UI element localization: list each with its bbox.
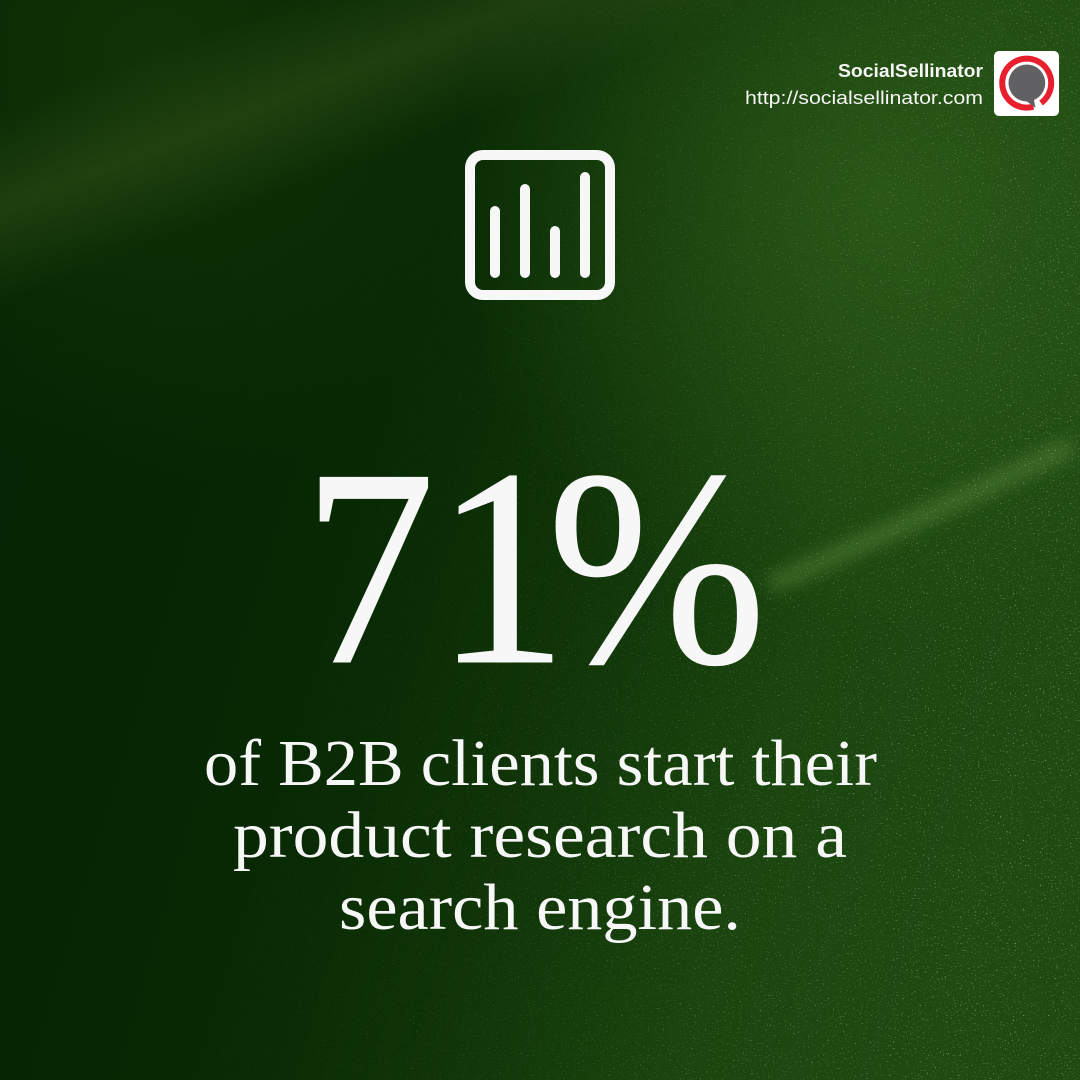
brand url: http://socialsellinator.com [745, 88, 983, 108]
big statistic: 71 [303, 412, 568, 724]
icon: bar chart in rounded square [470, 155, 610, 295]
description text: search engine. [339, 871, 741, 944]
big statistic: % [547, 413, 766, 723]
description text: of B2B clients start their [204, 727, 877, 800]
brand name: SocialSellinator [838, 61, 983, 81]
description text: product research on a [233, 799, 847, 872]
description text [204, 727, 877, 944]
brand block [745, 51, 1059, 116]
brand logo [994, 51, 1059, 116]
